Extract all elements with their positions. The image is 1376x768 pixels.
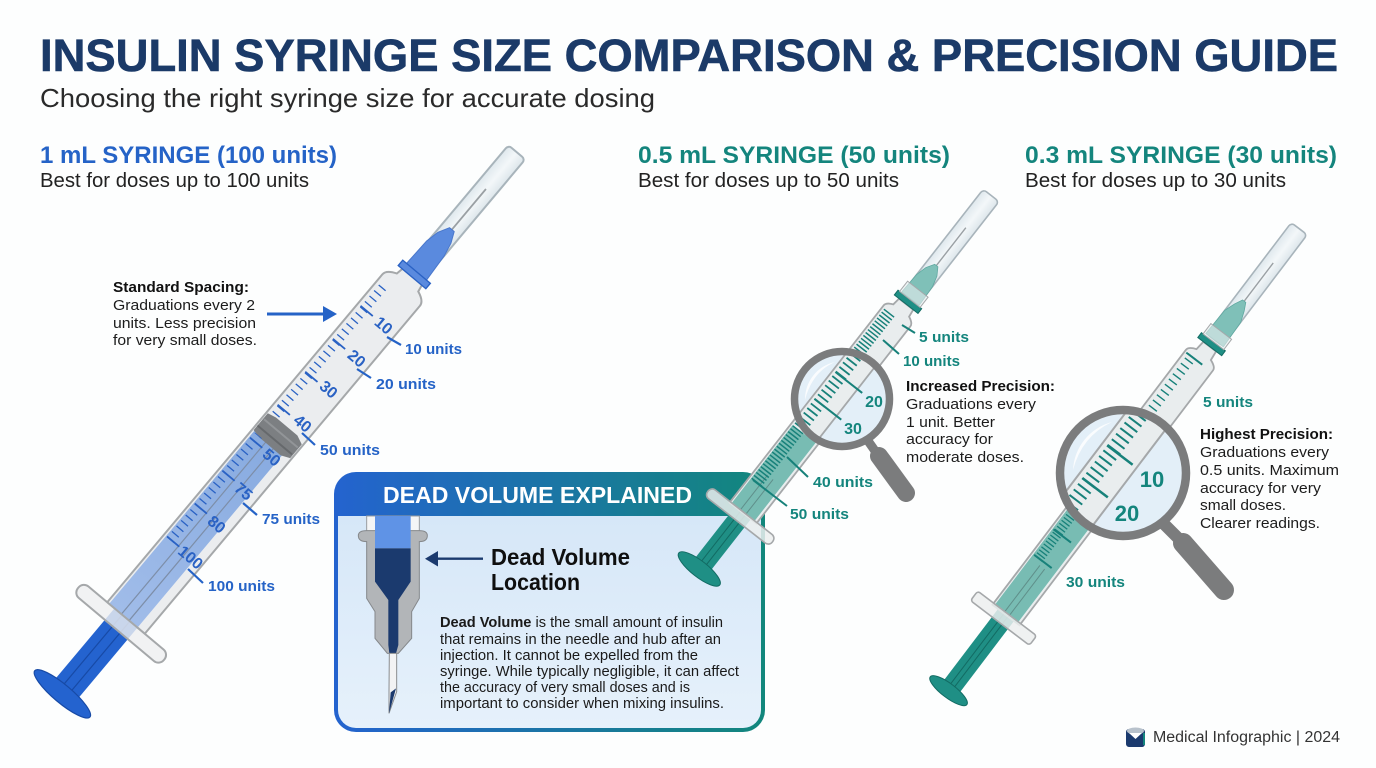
text block: standard spacing: Standard Spacing: — [113, 279, 249, 296]
magnifier handle — [866, 438, 906, 493]
magnified scale — [798, 355, 886, 443]
callouts: 0.5 mL unit labels: 50 units — [790, 506, 849, 523]
barrel — [107, 258, 433, 634]
scale numbers: 1 mL barrel: 40 — [290, 412, 314, 436]
syringe: 0.5 mL — [662, 170, 1023, 600]
text block: dead volume description: important to consider when mixing insulins. — [440, 696, 724, 712]
text block: standard spacing: for very small doses. — [113, 332, 257, 349]
footer — [1126, 728, 1340, 747]
insulin fill — [731, 425, 816, 522]
arrow: dead volume location — [425, 551, 483, 566]
text block: increased precision — [906, 378, 1055, 466]
scale numbers: 1 mL barrel: 75 — [231, 480, 255, 504]
callouts: 0.5 mL unit labels: 10 units — [903, 353, 960, 370]
text block: highest precision: accuracy for very — [1200, 480, 1322, 497]
heading: 0.5 mL syringe: 0.5 mL SYRINGE (50 units) — [638, 142, 950, 169]
heading: 0.3 mL syringe: Best for doses up to 30 units — [1025, 170, 1286, 192]
magnified numbers: 20 — [1115, 501, 1139, 526]
plunger rod — [29, 591, 157, 724]
text block: highest precision — [1200, 426, 1339, 532]
subtitle: Choosing the right syringe size for accurate dosing — [40, 83, 655, 113]
panel heading: DEAD VOLUME EXPLAINED — [383, 482, 692, 508]
diagram: needle hub — [358, 516, 427, 713]
heading: 1 mL syringe: Best for doses up to 100 units — [40, 170, 309, 192]
text block: dead volume description: injection. It cannot be expelled from the — [440, 648, 698, 664]
label: dead volume location: Dead Volume — [491, 544, 630, 570]
heading: 0.3 mL syringe — [1025, 142, 1337, 192]
callouts: 0.3 mL unit labels — [1066, 394, 1253, 591]
text block: highest precision: small doses. — [1200, 497, 1286, 514]
text block: dead volume description — [440, 615, 739, 712]
callouts: 0.5 mL unit labels: 5 units — [919, 329, 969, 346]
text block: dead volume description: Dead Volume is the small amount of insulin — [440, 615, 723, 631]
magnifier ring — [794, 352, 890, 446]
text block: highest precision: Clearer readings. — [1200, 515, 1320, 532]
magnifier handle — [1165, 525, 1224, 590]
panel: dead volume explained — [334, 472, 765, 732]
text block: highest precision: 0.5 units. Maximum — [1200, 462, 1339, 479]
text block: standard spacing: Graduations every 2 — [113, 297, 255, 314]
barrel — [730, 294, 920, 523]
scale numbers: 1 mL barrel: 100 — [174, 543, 206, 573]
callouts: 0.5 mL unit labels — [753, 325, 969, 523]
syringe: 0.3 mL — [915, 206, 1329, 719]
magnifier: 0.3 mL — [1056, 406, 1234, 600]
needle cap and hub — [1198, 220, 1311, 356]
magnified numbers: 10 — [1140, 467, 1164, 492]
label: dead volume location — [491, 544, 630, 595]
graduations — [1038, 356, 1196, 562]
heading: 1 mL syringe — [40, 142, 337, 192]
scale numbers: 1 mL barrel: 20 — [344, 347, 368, 371]
callouts: 1 mL unit labels: 20 units — [376, 376, 436, 393]
magnifier ring — [1060, 410, 1186, 536]
insulin fill — [109, 429, 284, 628]
scale numbers: 1 mL barrel: 10 — [371, 314, 395, 338]
callouts: 1 mL unit labels: 50 units — [320, 442, 380, 459]
heading: 0.5 mL syringe: Best for doses up to 50 units — [638, 170, 899, 192]
heading: 1 mL syringe: 1 mL SYRINGE (100 units) — [40, 142, 337, 169]
callouts: 1 mL unit labels: 10 units — [405, 341, 462, 358]
text block: dead volume description: the accuracy of very small doses and is — [440, 680, 690, 696]
text block: increased precision: 1 unit. Better — [906, 414, 995, 431]
callouts: 0.3 mL unit labels: 5 units — [1203, 394, 1253, 411]
text block: dead volume description: that remains in the needle and hub after an — [440, 632, 721, 648]
magnified numbers — [1115, 467, 1164, 526]
panel frame — [334, 472, 765, 732]
magnifier: 0.5 mL — [790, 348, 915, 502]
panel interior — [338, 516, 761, 728]
magnified numbers: 20 — [865, 394, 883, 411]
scale numbers: 1 mL barrel: 80 — [204, 513, 228, 537]
needle cap and hub — [894, 186, 1003, 313]
text block: increased precision: Graduations every — [906, 396, 1037, 413]
syringe: 1 mL — [14, 116, 560, 737]
credit: Medical Infographic | 2024 — [1153, 729, 1340, 746]
text block: increased precision: Increased Precision: — [906, 378, 1055, 395]
heading: 0.5 mL syringe — [638, 142, 950, 192]
label: dead volume location: Location — [491, 569, 580, 595]
arrow: standard spacing — [267, 306, 337, 322]
plunger — [674, 495, 765, 591]
scale numbers: 1 mL barrel — [174, 314, 395, 573]
graduations — [756, 311, 891, 483]
text block: standard spacing: units. Less precision — [113, 315, 256, 332]
plunger — [926, 600, 1026, 710]
text block: highest precision: Graduations every — [1200, 444, 1330, 461]
icon: vial logo — [1126, 728, 1145, 747]
title: INSULIN SYRINGE SIZE COMPARISON & PRECISION GUIDE — [40, 30, 1338, 81]
text block: highest precision: Highest Precision: — [1200, 426, 1333, 443]
text block: dead volume description: syringe. While typically negligible, it can affect — [440, 664, 739, 680]
text block: increased precision: moderate doses. — [906, 449, 1024, 466]
barrel — [992, 336, 1223, 625]
text block: increased precision: accuracy for — [906, 431, 993, 448]
flange — [73, 582, 169, 665]
scale numbers: 1 mL barrel: 50 — [259, 446, 283, 470]
callouts: 1 mL unit labels: 75 units — [262, 511, 320, 528]
stopper — [252, 412, 304, 461]
flange — [705, 487, 776, 546]
callouts: 1 mL unit labels: 100 units — [208, 578, 275, 595]
hub — [398, 141, 531, 289]
scale numbers: 1 mL barrel: 30 — [316, 378, 340, 402]
callouts: 0.3 mL unit labels: 30 units — [1066, 574, 1125, 591]
magnified numbers — [844, 394, 883, 438]
callouts: 1 mL unit labels — [188, 337, 462, 595]
callouts: 0.5 mL unit labels: 40 units — [813, 474, 873, 491]
flange — [970, 591, 1037, 645]
graduations — [170, 287, 385, 542]
magnified numbers: 30 — [844, 421, 862, 438]
heading: 0.3 mL syringe: 0.3 mL SYRINGE (30 units) — [1025, 142, 1337, 169]
insulin fill — [994, 509, 1091, 623]
magnified scale — [1064, 414, 1182, 532]
text block: standard spacing — [113, 279, 257, 349]
